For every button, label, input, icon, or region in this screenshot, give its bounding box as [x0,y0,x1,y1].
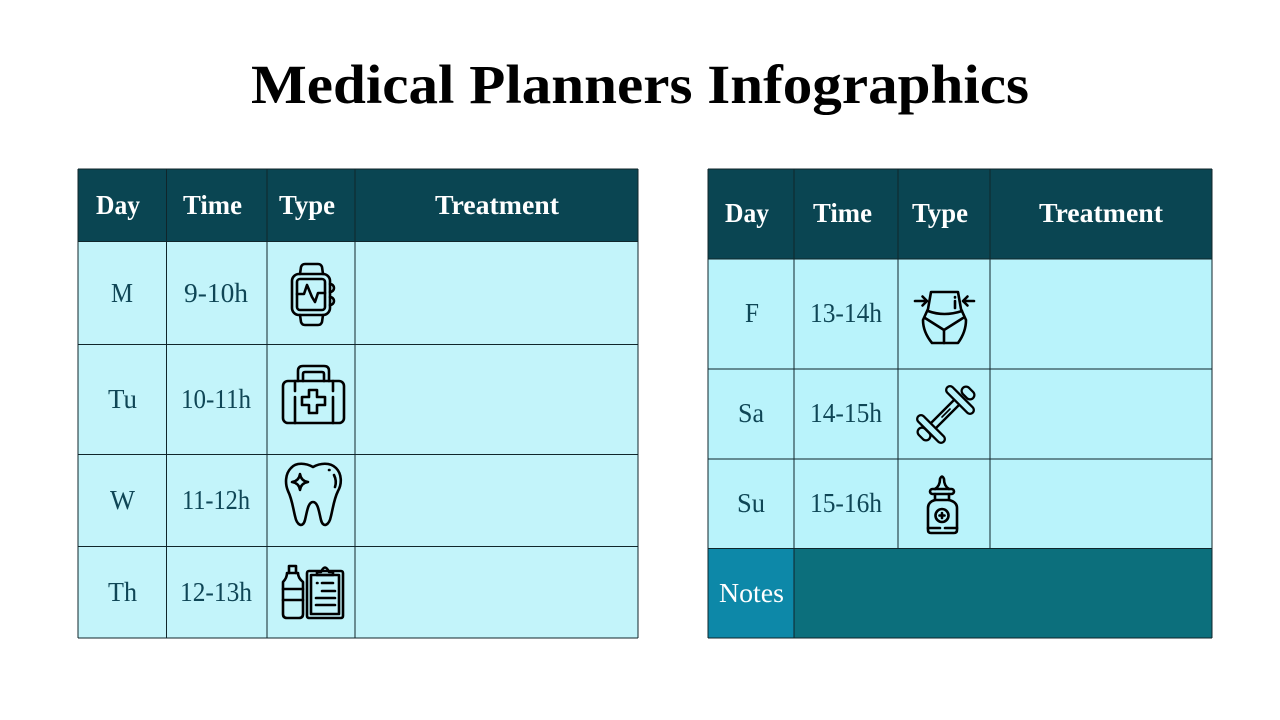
row: Saturday [738,390,970,439]
icon: tooth [286,464,341,525]
left table header row: Time [183,190,242,220]
row: Tuesday: 10-11h [181,384,251,414]
row: Sunday [737,476,957,533]
title: Medical Planners Infographics [251,54,1029,115]
right table header row [708,169,1212,259]
icon: bottle and clipboard [283,566,343,618]
row: Wednesday [110,464,341,525]
row: Monday: 9-10h [184,278,248,308]
notes row: Notes [719,578,784,608]
row: Wednesday: 11-12h [182,485,250,515]
row: Saturday: Sa [738,398,764,428]
icon: first aid kit [283,366,344,423]
icon: smartwatch [292,264,334,325]
right table grid [708,169,1212,638]
row: Thursday [108,566,343,618]
row: Tuesday: Tu [108,384,137,414]
left table header row: Type [279,190,335,220]
row: Thursday: 12-13h [180,577,252,607]
row: Friday: F [745,298,759,328]
notes row [708,549,1212,638]
row: Monday: M [111,278,133,308]
row: Wednesday: W [110,485,136,515]
row: Sunday: Su [737,488,765,518]
row: Friday [745,292,974,343]
left table header row: Day [96,190,140,220]
row: Thursday: Th [108,577,137,607]
left table header row [78,169,638,242]
row: Monday [111,264,334,325]
icon: dropper bottle [928,476,957,533]
row: Friday: 13-14h [810,298,882,328]
left table body [78,242,638,638]
icon: dumbbell [921,390,970,439]
panel: right planner table [708,169,1212,638]
right table header row: Time [813,198,872,228]
left table header row: Treatment [435,190,559,220]
row: Saturday: 14-15h [810,398,882,428]
right table header row: Treatment [1039,198,1163,228]
row: Tuesday [108,366,344,423]
icon: waist measurement [915,292,974,343]
right table header row: Type [912,198,968,228]
right table header row: Day [725,198,769,228]
row: Sunday: 15-16h [810,488,882,518]
left table grid [78,169,638,638]
panel: left planner table [78,169,638,638]
right table body [708,259,1212,549]
